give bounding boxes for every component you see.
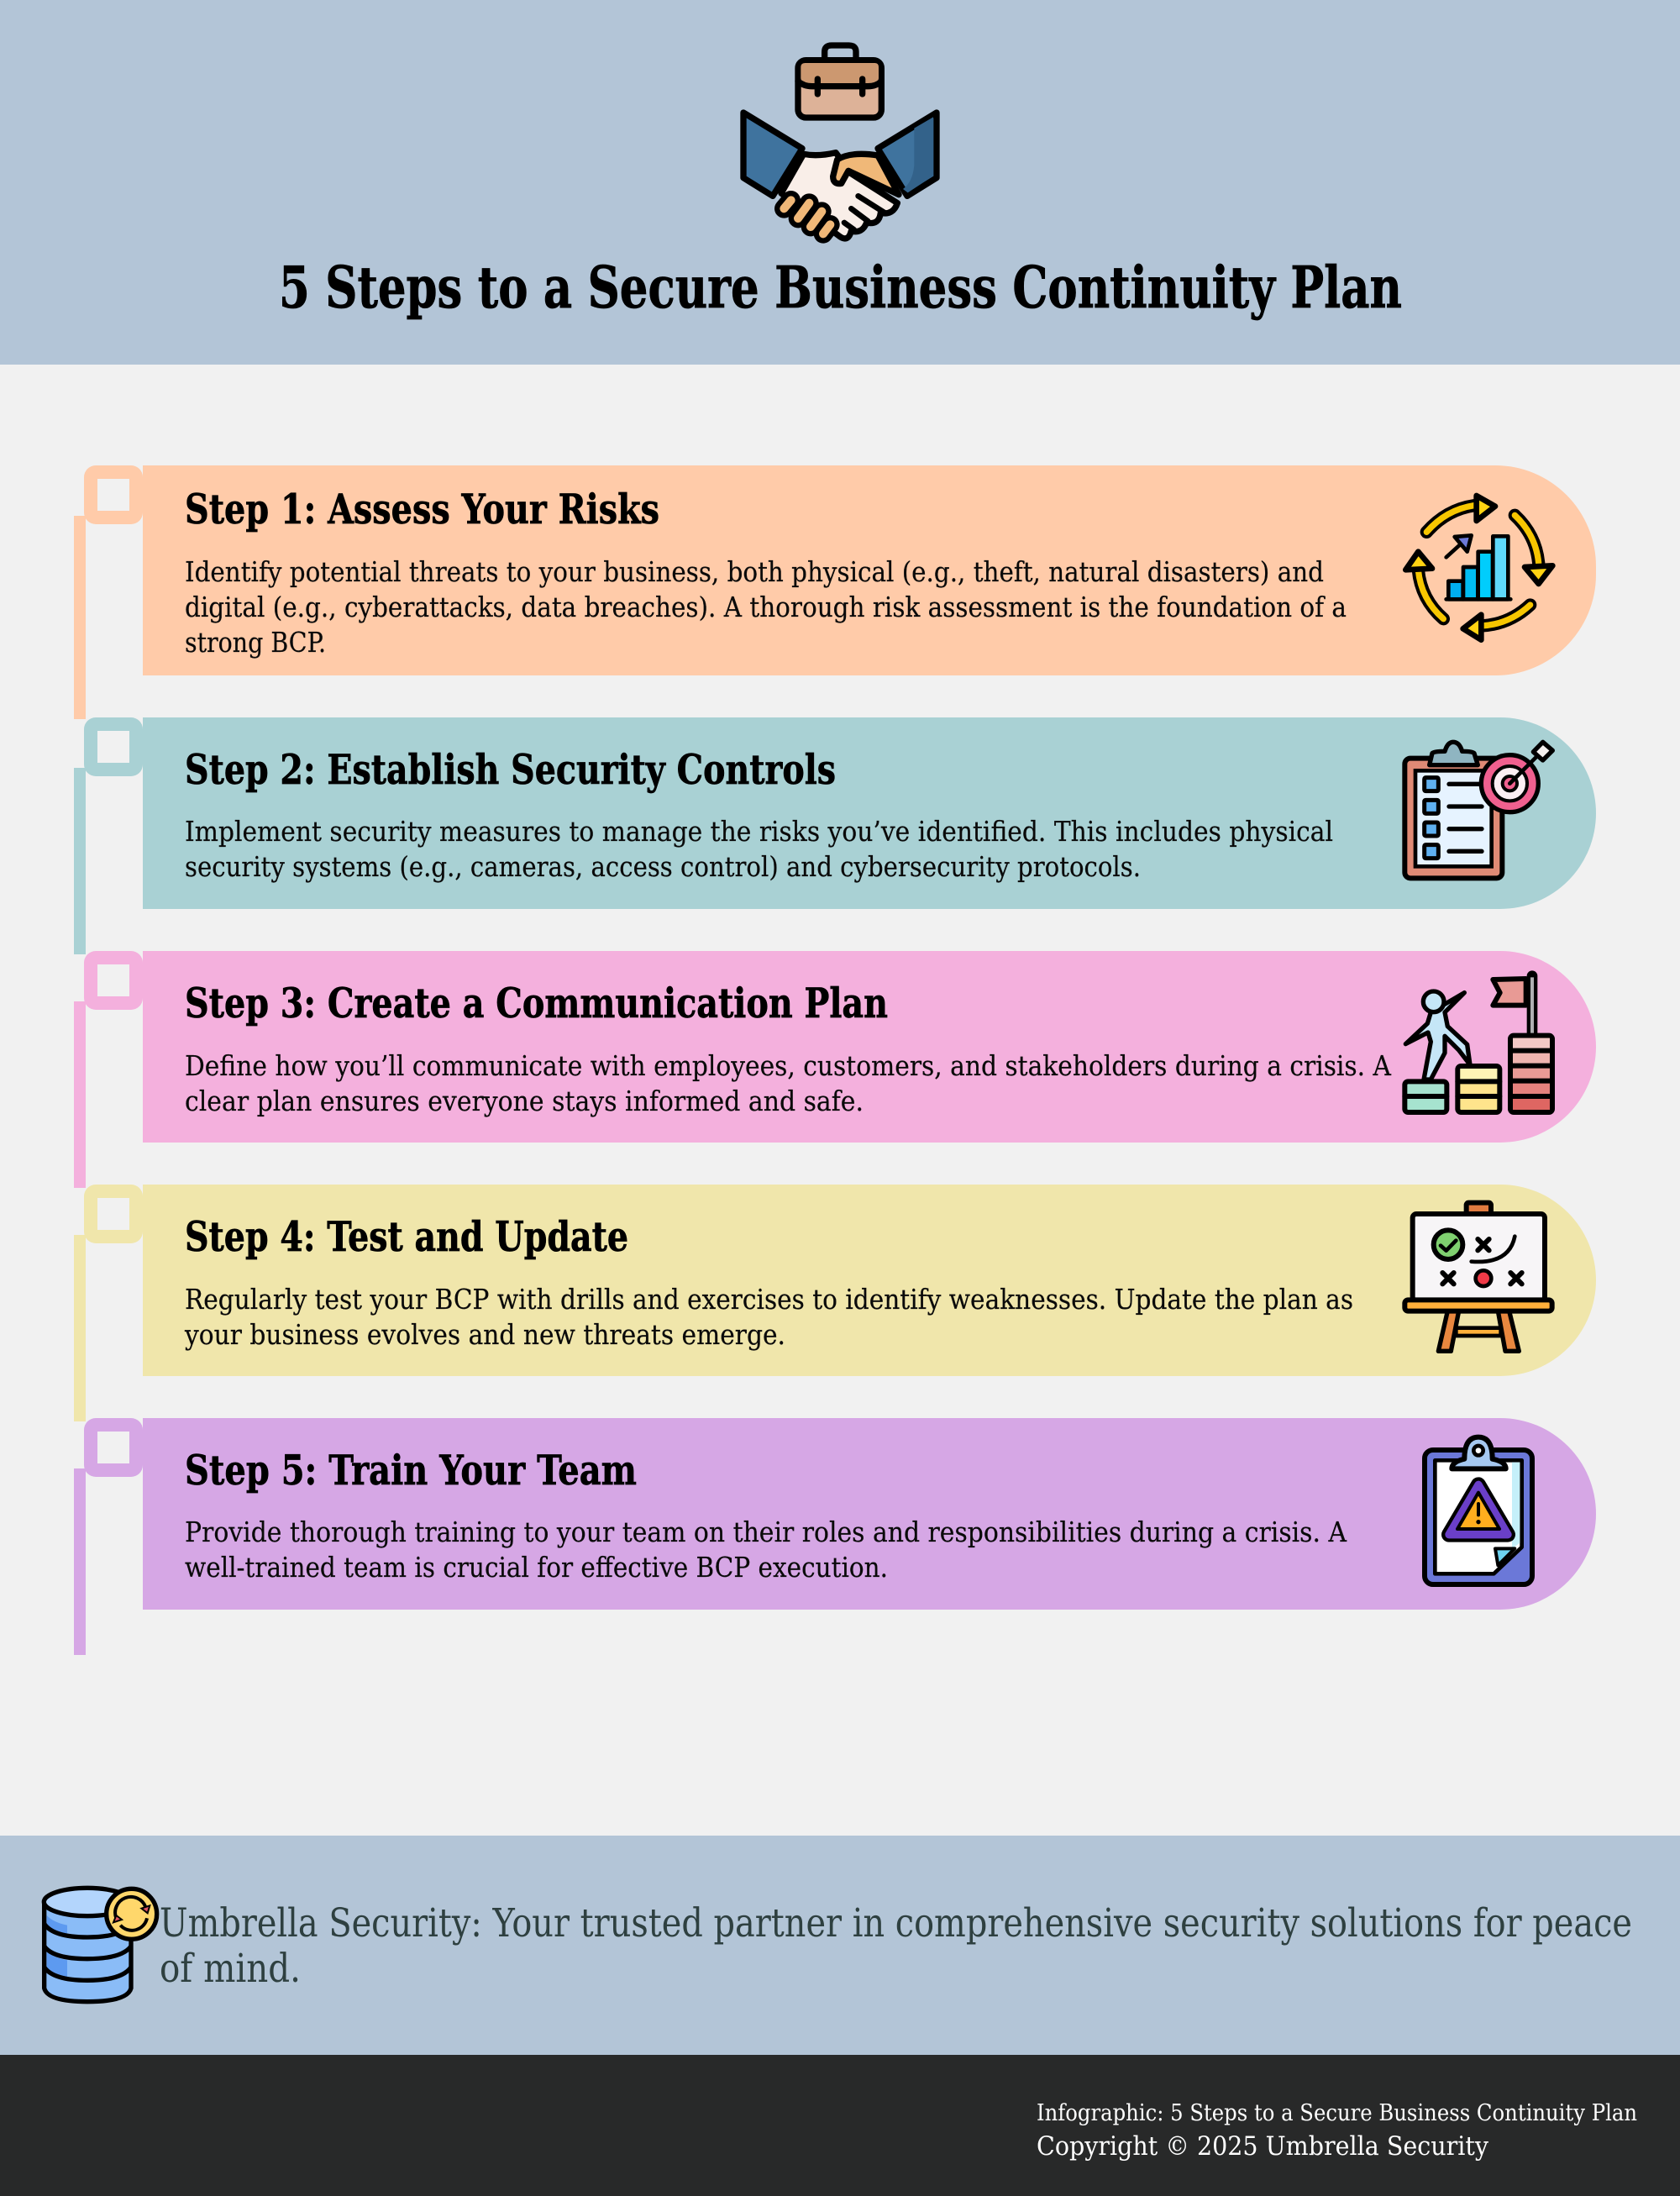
step 2 panel <box>74 717 1596 954</box>
icon: database sync <box>44 1888 157 2002</box>
icon: briefcase and handshake <box>743 45 937 239</box>
step 5 marker <box>84 1418 143 1477</box>
step 3 panel <box>74 951 1596 1188</box>
step 2 body text: Implement security measures to manage the risks you’ve identified. This includes physical <box>185 815 1333 848</box>
step 1 body text: Identify potential threats to your business, both physical (e.g., theft, natural disasters) and <box>185 555 1324 588</box>
title: 5 Steps to a Secure Business Continuity Plan <box>279 255 1402 322</box>
step 3 body text: Define how you’ll communicate with employees, customers, and stakeholders during a crisis. A <box>185 1049 1392 1082</box>
icon: strategy board <box>1404 1203 1552 1351</box>
step 1 body text: strong BCP. <box>185 626 326 659</box>
step 4 body text: your business evolves and new threats emerge. <box>184 1318 785 1351</box>
step 1 body text <box>185 555 1347 659</box>
step 5 body text <box>185 1516 1347 1584</box>
step 2 body text: security systems (e.g., cameras, access control) and cybersecurity protocols. <box>185 850 1141 883</box>
step 4 body text <box>184 1283 1353 1351</box>
step 2 marker <box>84 717 143 776</box>
copyright line: Copyright © 2025 Umbrella Security <box>1037 2131 1488 2162</box>
header band <box>0 0 1680 365</box>
step 5 body text: Provide thorough training to your team on their roles and responsibilities during a crisis. A <box>185 1516 1347 1548</box>
tagline: of mind. <box>160 1946 301 1992</box>
icon: warning clipboard <box>1425 1437 1532 1584</box>
step 4 marker <box>84 1185 143 1243</box>
icon: risk cycle chart <box>1405 496 1552 640</box>
step 2 heading: Step 2: Establish Security Controls <box>185 745 836 794</box>
icon: checklist and target <box>1404 742 1552 878</box>
step 3 body text: clear plan ensures everyone stays informed and safe. <box>185 1085 864 1117</box>
step 3 heading: Step 3: Create a Communication Plan <box>185 979 888 1027</box>
step 5 body text: well-trained team is crucial for effective BCP execution. <box>185 1551 888 1584</box>
step 1 heading: Step 1: Assess Your Risks <box>185 485 659 533</box>
step 1 body text: digital (e.g., cyberattacks, data breaches). A thorough risk assessment is the foundation of a <box>185 591 1347 623</box>
step 5 heading: Step 5: Train Your Team <box>185 1446 637 1495</box>
company band <box>0 1836 1680 2055</box>
step 3 body text <box>185 1049 1392 1117</box>
icon: climbing steps to flag <box>1404 976 1552 1112</box>
step 4 heading: Step 4: Test and Update <box>185 1212 628 1261</box>
step 1 marker <box>84 465 143 524</box>
footer <box>0 2055 1680 2196</box>
step 1 panel <box>74 465 1596 719</box>
tagline <box>160 1900 1632 1992</box>
step 5 panel <box>74 1418 1596 1655</box>
step 2 body text <box>185 815 1333 883</box>
step 3 marker <box>84 951 143 1010</box>
step 4 body text: Regularly test your BCP with drills and exercises to identify weaknesses. Update the plan as <box>185 1283 1353 1316</box>
step 4 panel <box>74 1185 1596 1421</box>
